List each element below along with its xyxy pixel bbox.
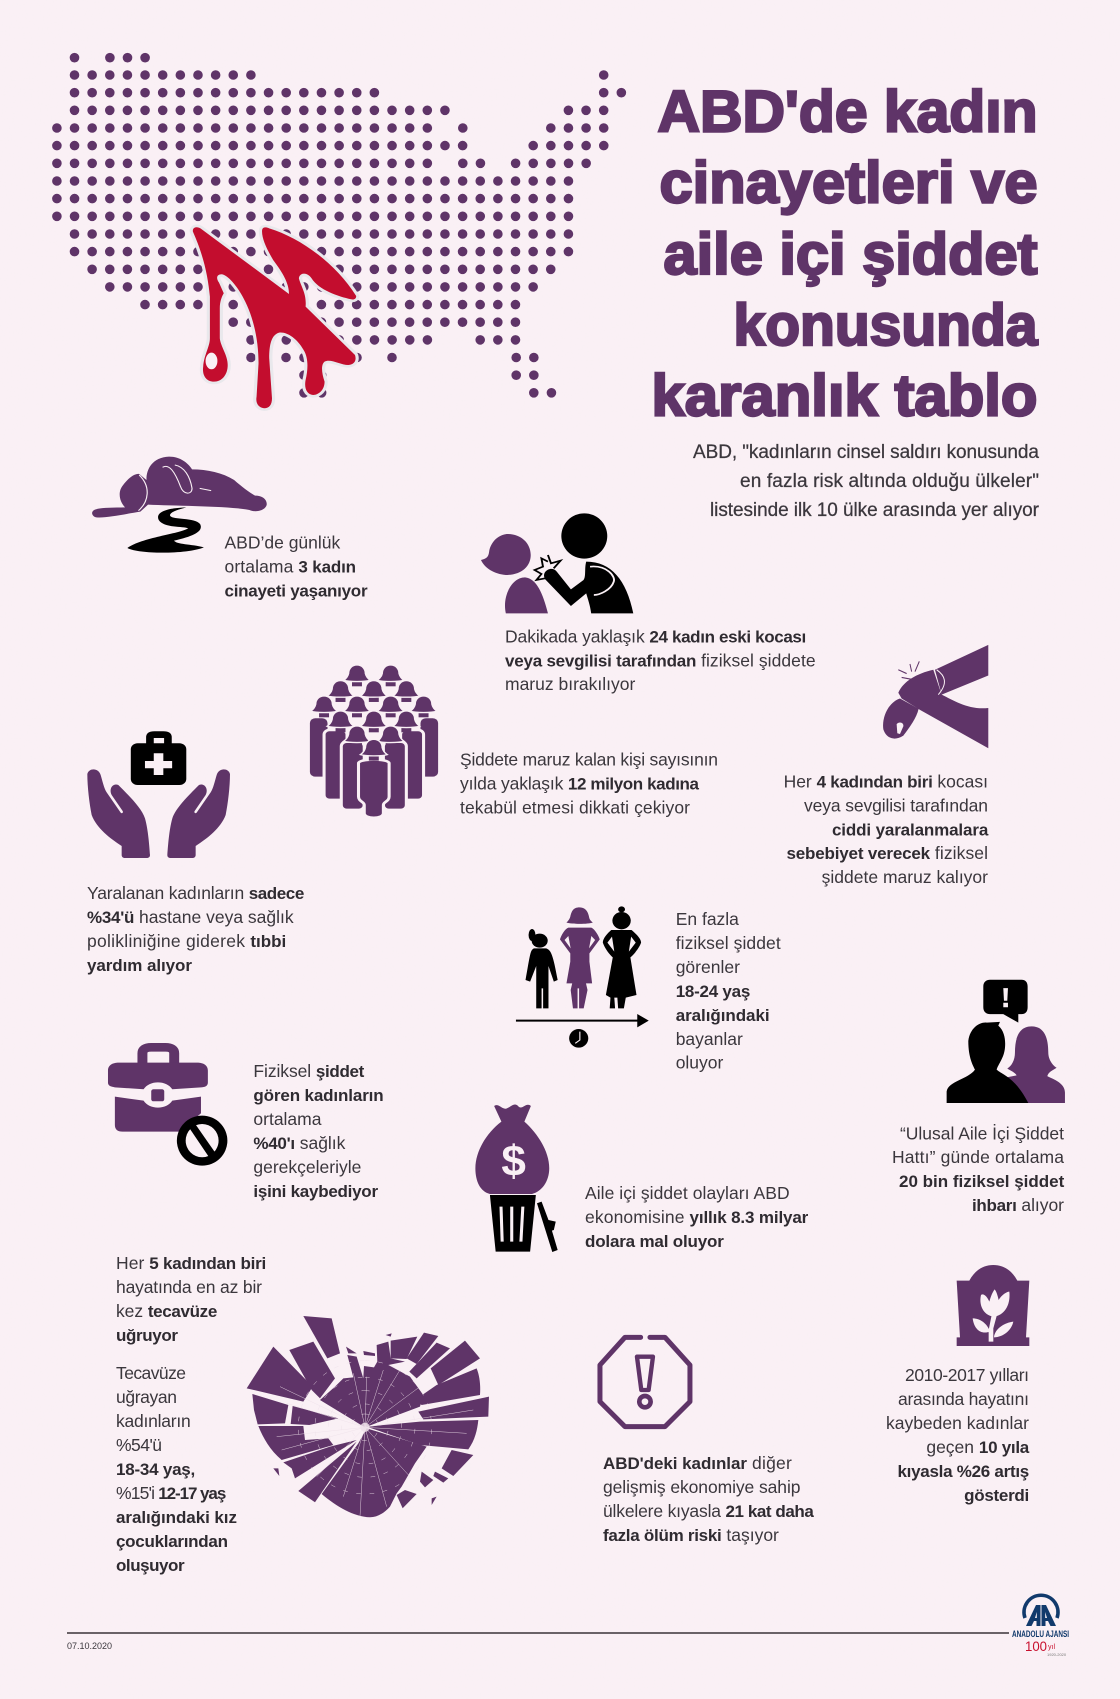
text: 26 percent: gösterdi <box>964 1486 1029 1505</box>
text: age breakdown <box>116 1363 237 1575</box>
text: 12 million: Şiddete maruz kalan kişi sayısının <box>460 750 718 770</box>
text: three women a day <box>224 532 368 600</box>
panel: 12 million women <box>310 665 718 818</box>
text: job loss <box>253 1061 383 1201</box>
text: cost <box>585 1183 809 1251</box>
subtitle <box>693 442 1040 521</box>
text: 21 times: gelişmiş ekonomiye sahip <box>603 1477 800 1497</box>
text: one in five: uğruyor <box>116 1326 178 1345</box>
footer <box>67 1595 1069 1657</box>
text: 12 million: yılda yaklaşık 12 milyon kadına <box>460 774 700 794</box>
title <box>652 80 1038 429</box>
text: 18-24: görenler <box>676 957 740 977</box>
panel: daily femicide <box>92 457 368 600</box>
dotted map of the USA <box>57 53 622 393</box>
panel: national hotline <box>892 980 1065 1215</box>
blood splash <box>193 227 356 408</box>
text: 18-24: fiziksel şiddet <box>676 933 781 953</box>
panel: medical help <box>87 735 304 975</box>
logo: Anadolu Ajansi: yıl <box>1048 1644 1055 1651</box>
text: 24 women per minute <box>505 626 816 694</box>
text: one in five: hayatında en az bir <box>116 1277 262 1297</box>
panel: job loss <box>108 1047 383 1201</box>
panel: partner violence per minute <box>481 513 816 694</box>
icon: man hitting woman <box>481 513 633 613</box>
icon: lying woman and blood <box>92 457 267 553</box>
text: three women a day: cinayeti yaşanıyor <box>224 582 368 600</box>
text: 21 times: fazla ölüm riski taşıyor <box>603 1525 779 1545</box>
text: age breakdown: uğrayan <box>116 1387 177 1407</box>
icon: speech bubble, man and woman <box>947 980 1065 1103</box>
text: job loss: %40'ı sağlık <box>253 1133 346 1153</box>
subtitle: en fazla risk altında olduğu ülkeler" <box>740 471 1039 492</box>
text: 26 percent: 2010-2017 yılları <box>905 1365 1029 1385</box>
text: age breakdown: kadınların <box>116 1411 191 1431</box>
text: age breakdown: oluşuyor <box>116 1556 185 1575</box>
text: one in five: Her 5 kadından biri <box>116 1253 266 1273</box>
text: 34 percent <box>87 883 304 975</box>
date: 07.10.2020 <box>67 1641 112 1651</box>
text: 21 times <box>603 1453 814 1545</box>
text: job loss: gerekçeleriyle <box>253 1157 361 1177</box>
text: hotline <box>892 1124 1065 1215</box>
text: hotline: 20 bin fiziksel şiddet <box>899 1172 1065 1191</box>
text: one in four: ciddi yaralanmalara <box>832 820 989 840</box>
text: one in four: veya sevgilisi tarafından <box>804 796 988 816</box>
text: 21 times: ABD'deki kadınlar diğer <box>603 1453 792 1473</box>
logo: Anadolu Ajansi: 1920-2020 <box>1047 1652 1067 1657</box>
text: 21 times: ülkelere kıyasla 21 kat daha <box>603 1501 814 1521</box>
icon: money bag in trash can: $ <box>501 1137 526 1186</box>
text: hotline: ihbarı alıyor <box>972 1195 1064 1215</box>
text: cost: Aile içi şiddet olayları ABD <box>585 1183 790 1203</box>
text: job loss: Fiziksel şiddet <box>253 1061 365 1081</box>
text: job loss: gören kadınların <box>253 1086 383 1105</box>
subtitle: listesinde ilk 10 ülke arasında yer alıyor <box>710 500 1040 521</box>
panel: 26 percent increase <box>886 1265 1030 1505</box>
text: 26 percent: arasında hayatını <box>898 1389 1029 1409</box>
text: age breakdown: aralığındaki kız <box>116 1508 237 1527</box>
text: 18-24: aralığındaki <box>676 1006 769 1025</box>
text: 26 percent: kıyasla %26 artış <box>897 1462 1029 1481</box>
text: cost: dolara mal oluyor <box>585 1232 724 1251</box>
title: aile içi şiddet <box>664 222 1038 287</box>
text: age breakdown: %15'i 12-17 yaş <box>116 1483 226 1503</box>
text: job loss: işini kaybediyor <box>253 1182 378 1201</box>
text: 26 percent: kaybeden kadınlar <box>886 1413 1029 1433</box>
text: one in four: şiddete maruz kalıyor <box>822 867 988 887</box>
text: one in five <box>116 1253 266 1345</box>
text: age breakdown: Tecavüze <box>116 1363 186 1383</box>
text: age breakdown: %54'ü <box>116 1435 162 1455</box>
text: one in four <box>784 772 989 887</box>
text: one in four: sebebiyet verecek fiziksel <box>786 843 988 863</box>
text: 18-24: oluyor <box>676 1052 724 1072</box>
panel: rape statistics <box>116 1253 489 1575</box>
title: konusunda <box>734 293 1038 358</box>
text: 26 percent <box>886 1365 1030 1505</box>
text: 34 percent: polikliniğine giderek tıbbi <box>87 931 286 951</box>
text: 24 women per minute: veya sevgilisi tarafından fiziksel şiddete <box>505 650 816 670</box>
title: cinayetleri ve <box>660 151 1038 216</box>
panel: age 18-24 <box>516 906 781 1072</box>
text: age breakdown: 18-34 yaş, <box>116 1460 195 1479</box>
text: 24 women per minute: Dakikada yaklaşık 24 kadın eski kocası <box>505 626 806 646</box>
icon: hands holding first aid kit <box>87 735 230 858</box>
text: cost: ekonomisine yıllık 8.3 milyar <box>585 1207 809 1227</box>
panel: death risk <box>600 1337 814 1545</box>
title: ABD'de kadın <box>658 80 1038 145</box>
icon: crowd of women <box>310 665 438 818</box>
text: age breakdown: çocuklarından <box>116 1532 228 1551</box>
icon: money bag in trash can <box>475 1104 558 1252</box>
map: dotted USA with blood splash <box>57 53 622 408</box>
text: 34 percent: Yaralanan kadınların sadece <box>87 883 304 903</box>
icon: tombstone with flower <box>957 1265 1029 1346</box>
text: hotline: Hattı” günde ortalama <box>892 1147 1064 1167</box>
text: 12 million <box>460 750 718 818</box>
logo: Anadolu Ajansi: 100 <box>1025 1638 1047 1654</box>
text: one in five: kez tecavüze <box>116 1301 217 1321</box>
text: 26 percent: geçen 10 yıla <box>926 1437 1030 1457</box>
icon: shattered heart <box>247 1316 489 1517</box>
title: karanlık tablo <box>652 364 1038 429</box>
text: 34 percent: yardım alıyor <box>87 956 192 975</box>
text: 12 million: tekabül etmesi dikkati çekiyor <box>460 798 690 818</box>
text: job loss: ortalama <box>253 1109 322 1129</box>
panel: economic cost <box>475 1104 809 1252</box>
logo: Anadolu Ajansi <box>1012 1595 1069 1657</box>
panel: one in four women <box>784 645 989 887</box>
subtitle: ABD, "kadınların cinsel saldırı konusunda <box>693 442 1039 463</box>
logo: Anadolu Ajansi: ANADOLU AJANSI <box>1012 1629 1069 1640</box>
text: 34 percent: %34'ü hastane veya sağlık <box>87 907 294 927</box>
icon: hand gripping wrist <box>883 645 988 748</box>
text: 18-24: bayanlar <box>676 1029 743 1049</box>
text: 18-24: 18-24 yaş <box>676 982 750 1001</box>
icon: three women on time axis <box>516 906 649 1048</box>
text: one in four: Her 4 kadından biri kocası <box>784 772 988 792</box>
text: three women a day: ortalama 3 kadın <box>224 556 356 576</box>
text: 24 women per minute: maruz bırakılıyor <box>505 674 635 694</box>
icon: briefcase with prohibited sign <box>108 1047 227 1166</box>
text: hotline: “Ulusal Aile İçi Şiddet <box>900 1124 1064 1144</box>
text: 18-24: En fazla <box>676 909 739 929</box>
text: three women a day: ABD’de günlük <box>224 532 341 552</box>
text: 18-24 <box>676 909 781 1072</box>
icon: warning octagon <box>600 1337 690 1427</box>
